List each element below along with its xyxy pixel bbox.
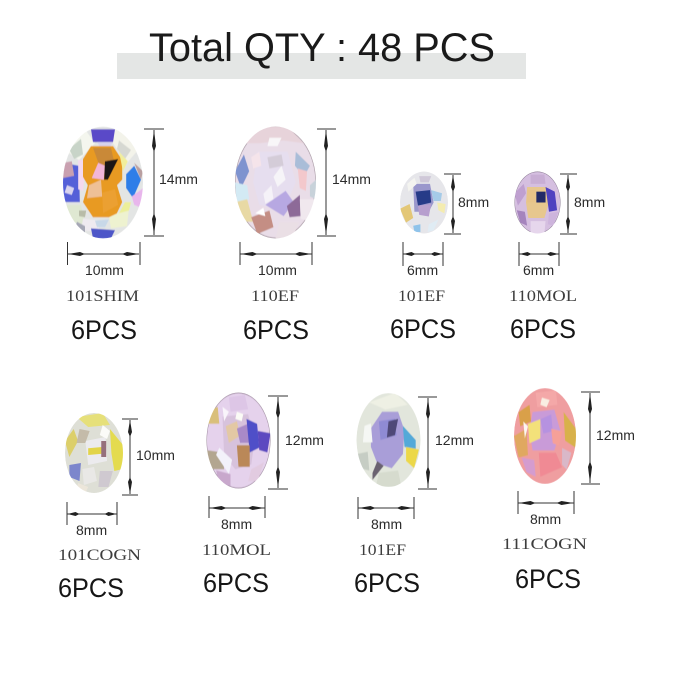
- dimension: width 8mm: [358, 497, 414, 532]
- gem: 101SHIM: [63, 126, 143, 238]
- dimension: height 12mm: 12mm: [435, 432, 474, 448]
- dimension: width 6mm: 6mm: [523, 262, 554, 278]
- quantity: 6PCS: [510, 314, 576, 344]
- item: 110MOL 12x8mm: [202, 392, 324, 598]
- model code: 110MOL: [202, 542, 271, 559]
- item: 110EF 14x10mm: [235, 126, 371, 345]
- gem: 101EF small: [400, 172, 448, 234]
- item: 101EF 12x8mm: [354, 393, 474, 598]
- dimension: height 8mm: [444, 174, 489, 234]
- dimension: height 8mm: 8mm: [458, 194, 489, 210]
- dimension: width 8mm: 8mm: [221, 516, 252, 532]
- quantity: 6PCS: [71, 315, 137, 345]
- dimension: width 8mm: 8mm: [530, 511, 561, 527]
- dimension: width 6mm: 6mm: [407, 262, 438, 278]
- item: 110MOL 8x6mm: [509, 172, 605, 344]
- dimension: height 14mm: 14mm: [332, 171, 371, 187]
- model code: 101SHIM: [66, 288, 139, 305]
- gem: 101EF large: [356, 393, 420, 487]
- dimension: height 14mm: [317, 129, 371, 236]
- model code: 110MOL: [509, 288, 577, 305]
- quantity: 6PCS: [354, 568, 420, 598]
- dimension: width 6mm: [519, 242, 559, 278]
- dimension: height 14mm: [144, 129, 198, 236]
- model code: 101EF: [359, 542, 406, 559]
- dimension: width 8mm: [67, 502, 117, 538]
- gem: 110EF: [235, 126, 316, 238]
- quantity: 6PCS: [243, 315, 309, 345]
- item: 101COGN 10x8mm: [58, 413, 175, 603]
- dimension: height 10mm: 10mm: [136, 447, 175, 463]
- item: 101SHIM 14x10mm: [63, 126, 198, 345]
- gem: 101COGN: [65, 413, 123, 493]
- model code: 110EF: [251, 288, 299, 305]
- quantity: 6PCS: [58, 573, 124, 603]
- dimension: height 12mm: [268, 396, 324, 489]
- dimension: width 6mm: [403, 242, 443, 278]
- dimension: height 12mm: [581, 392, 635, 484]
- model code: 101EF: [398, 288, 445, 305]
- quantity: 6PCS: [515, 564, 581, 594]
- title bar background: [117, 53, 526, 79]
- dimension: width 10mm: [68, 242, 140, 278]
- quantity: 6PCS: [390, 314, 456, 344]
- dimension: width 8mm: [209, 496, 265, 532]
- title: Total QTY : 48 PCS: [149, 26, 495, 70]
- gem: 110MOL large: [206, 392, 270, 488]
- dimension: height 12mm: 12mm: [285, 432, 324, 448]
- gem: 110MOL small: [514, 172, 560, 234]
- dimension: height 8mm: [560, 174, 605, 234]
- dimension: height 12mm: 12mm: [596, 427, 635, 443]
- dimension: height 8mm: 8mm: [574, 194, 605, 210]
- quantity: 6PCS: [203, 568, 269, 598]
- dimension: height 12mm: [418, 397, 474, 489]
- model code: 101COGN: [58, 547, 142, 564]
- dimension: width 8mm: [518, 491, 574, 527]
- gem: 111COGN: [514, 388, 576, 484]
- dimension: width 8mm: 8mm: [76, 522, 107, 538]
- dimension: width 10mm: [240, 242, 312, 278]
- dimension: width 8mm: 8mm: [371, 516, 402, 532]
- dimension: width 10mm: 10mm: [258, 262, 297, 278]
- dimension: height 14mm: 14mm: [159, 171, 198, 187]
- model code: 111COGN: [502, 536, 588, 553]
- dimension: width 10mm: 10mm: [85, 262, 124, 278]
- item: 101EF 8x6mm: [390, 172, 489, 344]
- item: 111COGN 12x8mm: [502, 388, 635, 594]
- dimension: height 10mm: [122, 419, 175, 495]
